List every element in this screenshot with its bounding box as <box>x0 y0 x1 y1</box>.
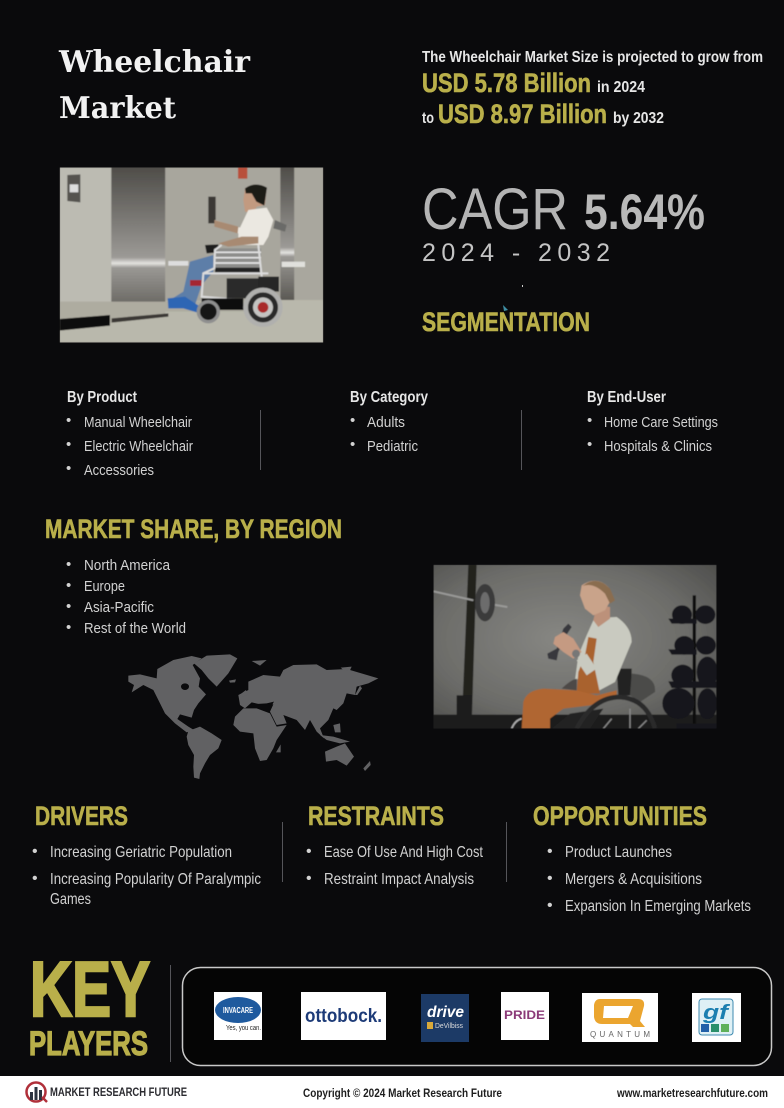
key players heading <box>29 945 150 1063</box>
logo: graham field <box>692 993 741 1042</box>
segment: by product: Manual Wheelchair <box>84 414 192 431</box>
title <box>58 45 251 126</box>
key players heading: KEY <box>30 945 150 1033</box>
segment: by product <box>66 389 193 479</box>
logo: invacare: Yes, you can. <box>226 1025 261 1032</box>
opportunities: • <box>547 870 553 887</box>
market size text: USD 5.78 Billion <box>422 68 591 98</box>
opportunities: Mergers & Acquisitions <box>565 871 702 888</box>
logo: ottobock: ottobock. <box>305 1006 382 1027</box>
region list: Rest of the World <box>84 620 186 637</box>
region list: • <box>66 556 71 573</box>
CAGR: CAGR <box>422 177 568 242</box>
segment: by product: Accessories <box>84 462 154 479</box>
market size text: USD 8.97 Billion <box>438 99 607 129</box>
segment: by end-user <box>587 389 718 455</box>
region list: • <box>66 577 71 594</box>
drivers: • <box>32 843 38 860</box>
logo: invacare: INVACARE <box>223 1006 253 1015</box>
opportunities <box>533 801 751 915</box>
drivers <box>32 801 261 908</box>
logo: ottobock <box>301 992 386 1040</box>
footer: MARKET RESEARCH FUTURE <box>50 1085 187 1099</box>
restraints: Restraint Impact Analysis <box>324 871 474 888</box>
logo: pride: PRIDE <box>504 1008 545 1022</box>
segment: by product: • <box>66 436 71 453</box>
logo: drive devilbiss <box>421 994 469 1042</box>
restraints: Ease Of Use And High Cost <box>324 844 483 861</box>
logo: pride <box>501 992 549 1040</box>
logo: quantum <box>582 993 658 1042</box>
region list: Europe <box>84 578 125 595</box>
restraints <box>306 801 483 888</box>
opportunities: • <box>547 897 553 914</box>
segment: by end-user: • <box>587 412 592 429</box>
opportunities: • <box>547 843 553 860</box>
segment: by product: • <box>66 412 71 429</box>
segment: by category: Adults <box>367 414 405 431</box>
logo: graham field: gf <box>702 1002 731 1024</box>
key players panel <box>182 968 772 1066</box>
segment: by category: Pediatric <box>367 438 418 455</box>
restraints: RESTRAINTS <box>308 801 444 831</box>
market size text: in 2024 <box>597 79 645 96</box>
title: Market <box>59 91 176 126</box>
segment: by end-user: Home Care Settings <box>604 414 718 431</box>
segment: by end-user: By End-User <box>587 389 666 406</box>
market share heading: MARKET SHARE, BY REGION <box>45 514 342 544</box>
logo: quantum: QUANTUM <box>590 1030 650 1039</box>
restraints: • <box>306 843 312 860</box>
title: Wheelchair <box>58 45 251 80</box>
segment: by end-user: • <box>587 436 592 453</box>
segment: by category: By Category <box>350 389 428 406</box>
drivers: Games <box>50 891 91 908</box>
opportunities: OPPORTUNITIES <box>533 801 707 831</box>
world map <box>128 654 378 779</box>
market size text: by 2032 <box>613 110 664 127</box>
photo: woman in wheelchair with dumbbell <box>430 562 720 732</box>
opportunities: Product Launches <box>565 844 672 861</box>
segment: by category: • <box>350 412 355 429</box>
region list: • <box>66 619 71 636</box>
logo: invacare <box>214 992 262 1040</box>
region list: North America <box>84 557 171 574</box>
market size text <box>422 49 763 129</box>
footer: Copyright © 2024 Market Research Future <box>303 1086 502 1100</box>
region list <box>66 556 186 637</box>
segment: by end-user: Hospitals & Clinics <box>604 438 712 455</box>
footer <box>0 1076 784 1108</box>
drivers: • <box>32 870 38 887</box>
logo: drive devilbiss: DeVilbiss <box>435 1023 463 1030</box>
drivers: DRIVERS <box>35 801 128 831</box>
CAGR <box>422 177 705 267</box>
segment: by product: By Product <box>67 389 138 406</box>
segment: by product: Electric Wheelchair <box>84 438 193 455</box>
drivers: Increasing Popularity Of Paralympic <box>50 871 261 888</box>
icon: market research future logo <box>26 1082 47 1102</box>
logo: drive devilbiss: drive <box>427 1004 464 1021</box>
region list: Asia-Pacific <box>84 599 154 616</box>
photo: man in wheelchair at elevator <box>55 165 330 345</box>
segmentation heading: SEGMENTATION <box>422 307 590 337</box>
restraints: • <box>306 870 312 887</box>
drivers: Increasing Geriatric Population <box>50 844 232 861</box>
CAGR: 2024 - 2032 <box>422 239 610 267</box>
segment: by category: • <box>350 436 355 453</box>
CAGR: 5.64% <box>584 184 705 240</box>
segment: by category <box>350 389 428 455</box>
market size text: to <box>422 110 434 127</box>
region list: • <box>66 598 71 615</box>
segment: by product: • <box>66 460 71 477</box>
key players heading: PLAYERS <box>29 1025 148 1063</box>
